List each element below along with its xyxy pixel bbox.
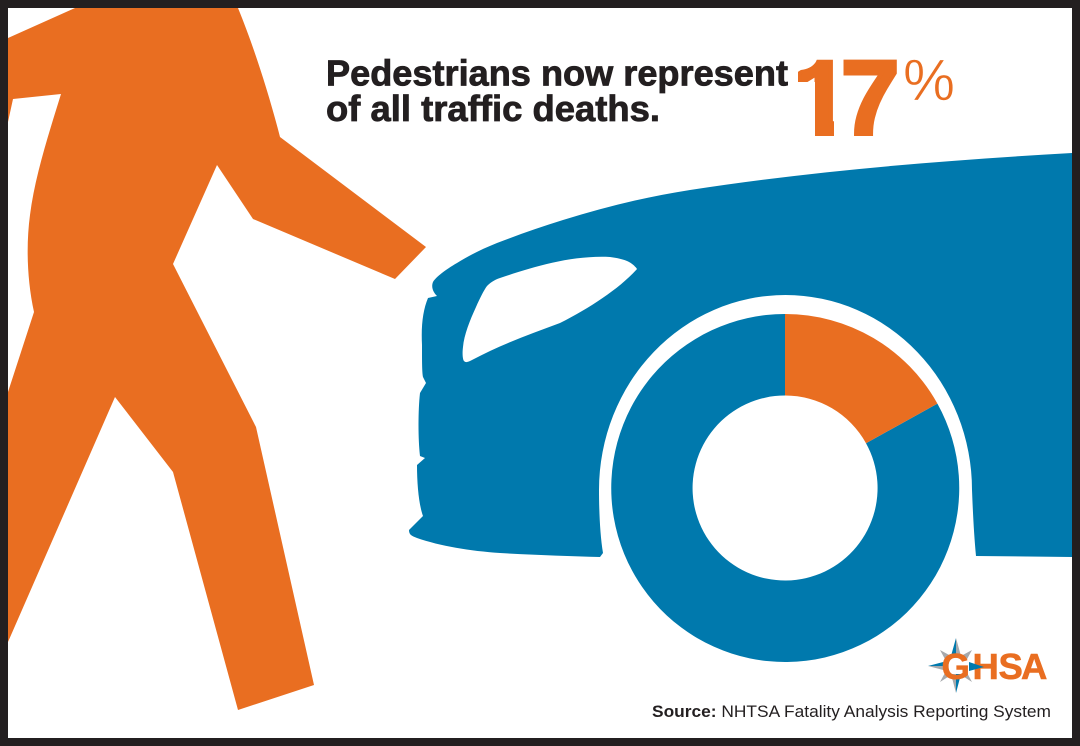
GHSA logo: GHSA [942, 646, 1047, 687]
icon: compass star [928, 638, 972, 693]
pedestrian figure [8, 8, 426, 710]
donut chart: 17 percent wheel [611, 314, 959, 662]
car silhouette [409, 153, 1072, 557]
statistic: 17%: % [903, 48, 955, 113]
statistic: 17%: 7 [841, 40, 899, 157]
source line: Source: NHTSA Fatality Analysis Reporting System [652, 702, 1051, 721]
remaining share [611, 314, 959, 662]
statistic: 17% [798, 60, 953, 136]
icon: compass east point [969, 662, 984, 671]
GHSA logo [928, 638, 1047, 693]
headline [326, 52, 788, 129]
statistic: 17%: 1 [792, 40, 850, 157]
17 percent share [785, 314, 937, 443]
headline: of all traffic deaths. [326, 88, 660, 129]
headline: Pedestrians now represent [326, 52, 788, 94]
